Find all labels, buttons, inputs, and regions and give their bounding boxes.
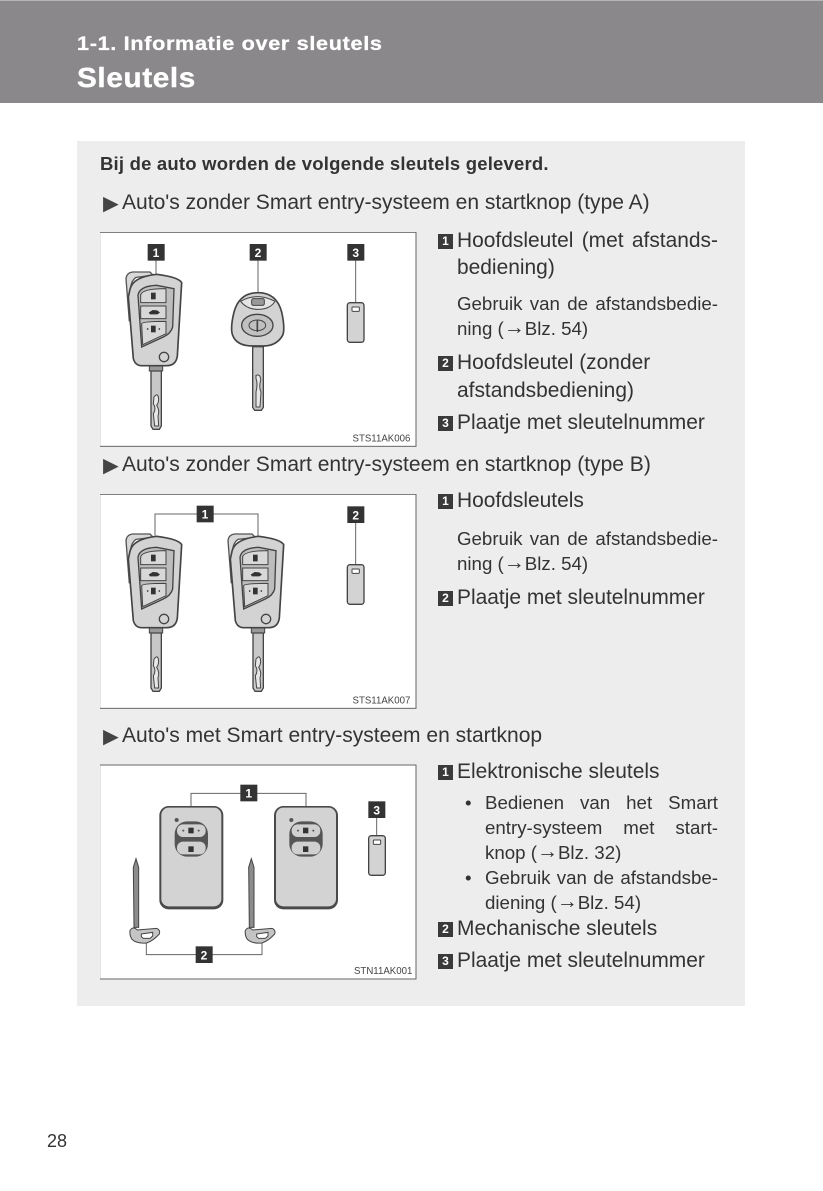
diagram: smart entry keys: 3 (373, 803, 380, 817)
page number: 28 (47, 1131, 67, 1151)
list: smart item 1: Elektronische sleutels (457, 760, 660, 783)
note: type B remote (457, 528, 718, 574)
diagram: type A keys: 1 (153, 246, 160, 260)
list: type A item 1 (438, 229, 718, 279)
list: type A item 2: 2 (442, 356, 449, 370)
diagram: type A keys: STS11AK006 (353, 433, 410, 444)
diagram: type B keys (100, 494, 416, 709)
list: type A item 2: Hoofdsleutel (zonder (457, 351, 650, 374)
list: type A item 1: bediening) (457, 256, 555, 279)
bullets: smart functions: diening (→Blz. 54) (485, 890, 641, 913)
diagram: type B keys: 2 (352, 508, 359, 522)
list: type A item 2: afstandsbediening) (457, 379, 634, 402)
section heading: 1-1. Informatie over sleutels (77, 33, 383, 55)
heading: type A: Auto's zonder Smart entry-systeem en startknop (type A) (122, 191, 650, 214)
panel: keys (77, 141, 745, 1006)
list: type B item 1: 1 (442, 494, 449, 508)
panel: keys: ► (98, 450, 124, 480)
note: type A remote: Gebruik van de afstandsbedie- (457, 293, 718, 314)
bullets: smart functions: • (465, 792, 472, 813)
bullets: smart functions: Gebruik van de afstandsbe- (485, 867, 718, 888)
bullets: smart functions: Bedienen van het Smart (485, 792, 718, 813)
panel: keys: ► (98, 188, 124, 218)
panel: keys: ► (98, 721, 124, 751)
header band (0, 0, 823, 103)
list: smart item 3: 3 (442, 954, 449, 968)
diagram: type A keys: 2 (255, 246, 262, 260)
list: smart item 3: Plaatje met sleutelnummer (457, 949, 705, 972)
note: type A remote: ning (→Blz. 54) (457, 316, 588, 338)
bullets: smart functions: knop (→Blz. 32) (485, 840, 621, 863)
list: type B item 1: Hoofdsleutels (457, 489, 584, 512)
diagram: smart entry keys (100, 764, 416, 980)
heading: smart entry: Auto's met Smart entry-systeem en startknop (122, 724, 542, 747)
bullets: smart functions: entry-systeem met start- (485, 817, 718, 838)
diagram: smart entry keys: STN11AK001 (354, 966, 412, 977)
note: type B remote: ning (→Blz. 54) (457, 550, 588, 574)
list: smart item 2: Mechanische sleutels (457, 917, 657, 940)
list: type A item 2 (438, 351, 650, 402)
list: type A item 3: 3 (442, 416, 449, 430)
list: type B item 2: Plaatje met sleutelnummer (457, 586, 705, 609)
list: type A item 1: 1 (442, 234, 449, 248)
note: type A remote (457, 293, 718, 339)
list: smart item 1: 1 (442, 764, 449, 778)
page title: Sleutels (77, 62, 196, 93)
diagram: smart entry keys: 2 (201, 948, 208, 962)
bullets: smart functions: • (465, 867, 472, 888)
list: type B item 2: 2 (442, 590, 449, 604)
diagram: type B keys: 1 (202, 508, 209, 522)
note: type B remote: Gebruik van de afstandsbedie- (457, 528, 718, 549)
list: smart item 2: 2 (442, 922, 449, 936)
diagram: type A keys (100, 232, 416, 447)
list: type A item 1: Hoofdsleutel (met afstands- (457, 229, 718, 252)
diagram: smart entry keys: 1 (245, 787, 252, 801)
diagram: type A keys: 3 (352, 246, 359, 260)
heading: type B: Auto's zonder Smart entry-systeem en startknop (type B) (122, 453, 651, 476)
diagram: type B keys: STS11AK007 (353, 695, 410, 706)
intro text: Bij de auto worden de volgende sleutels geleverd. (100, 153, 549, 174)
bullets: smart functions (465, 792, 718, 913)
list: type A item 3: Plaatje met sleutelnummer (457, 411, 705, 434)
